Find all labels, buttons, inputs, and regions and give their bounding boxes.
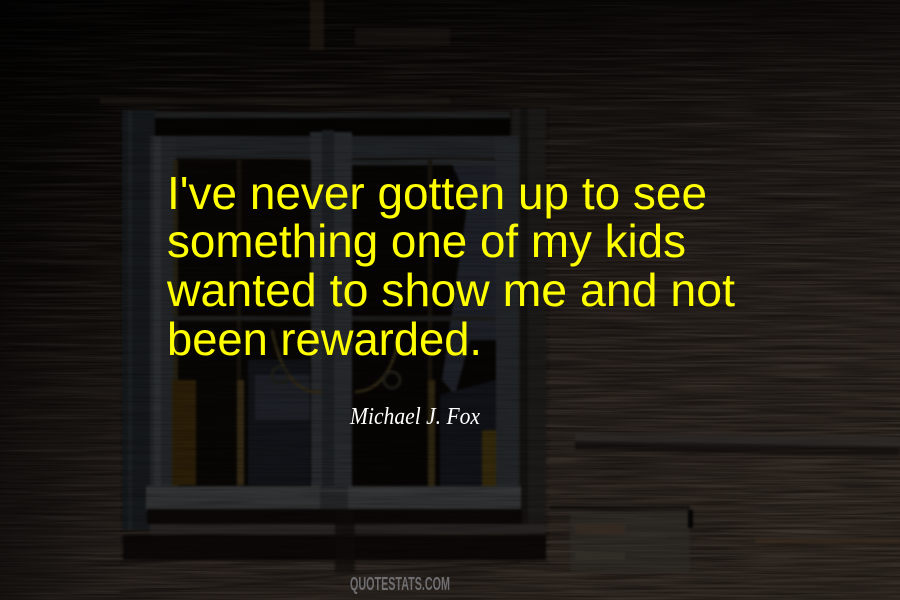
author name: Michael J. Fox <box>349 404 480 430</box>
texture over window <box>120 105 550 565</box>
right pane <box>352 160 496 486</box>
window sill <box>123 486 546 572</box>
left pane <box>172 160 311 486</box>
quote text: something one of my kids <box>167 215 686 267</box>
ornament in panes <box>272 330 400 392</box>
vertical stiles <box>150 130 519 512</box>
quote text: been rewarded. <box>167 313 482 365</box>
window frame <box>122 108 546 572</box>
quote text: wanted to show me and not <box>166 264 735 316</box>
upper sash rail <box>152 136 518 158</box>
watermark: QUOTESTATS.COM <box>350 574 450 594</box>
quote text: I've never gotten up to see <box>167 167 707 219</box>
lintel <box>155 112 510 136</box>
left and right posts <box>122 108 546 530</box>
quote text <box>166 167 735 365</box>
